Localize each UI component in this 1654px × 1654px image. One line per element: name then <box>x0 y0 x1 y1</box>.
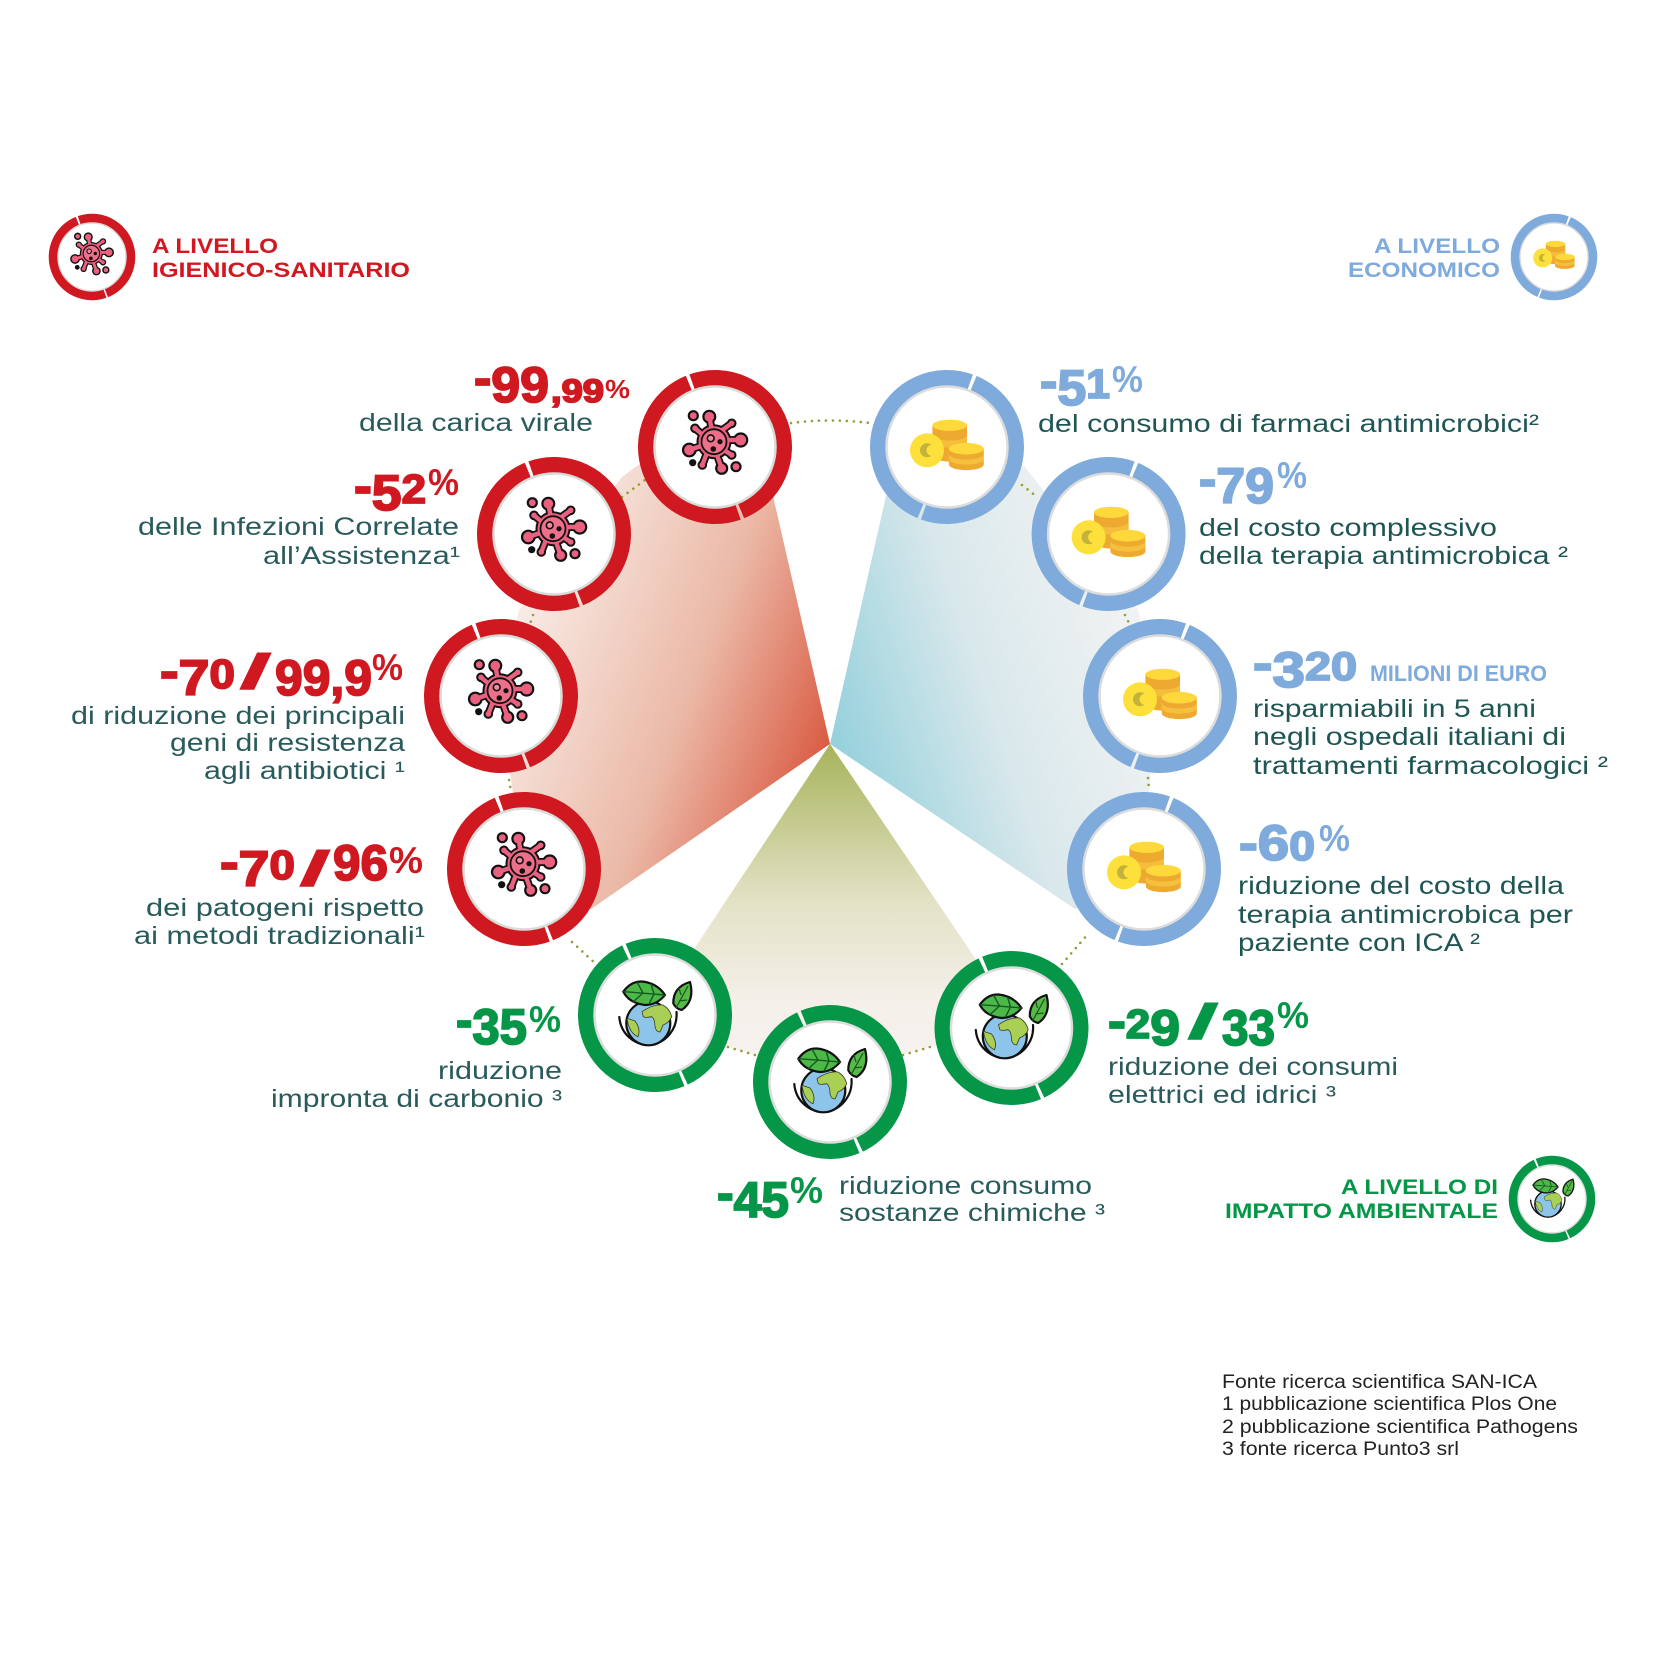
stat: -70/96% patogeni: 96 <box>333 835 388 891</box>
stat: -70/99,9% geni di resistenza: 99,9 <box>275 650 372 706</box>
icon: globe 2 <box>740 992 920 1172</box>
stat: -52% Infezioni Correlate: - <box>354 458 371 514</box>
stat: -70/99,9% geni di resistenza: 0 <box>210 651 235 697</box>
stat: -45% sostanze chimiche: 45 <box>734 1172 789 1228</box>
stat: -29/33% consumi elettrici e idrici <box>1108 993 1398 1109</box>
stat: -70/99,9% geni di resistenza: agli antibiotici ¹ <box>204 757 405 785</box>
icon: virus 1 <box>627 359 803 535</box>
stat: -70/99,9% geni di resistenza <box>71 643 405 785</box>
icon: virus 3 <box>413 608 589 784</box>
stat: -52% Infezioni Correlate: all’Assistenza¹ <box>263 542 460 570</box>
stat: -51% farmaci antimicrobici: del consumo di farmaci antimicrobici² <box>1038 410 1539 438</box>
footnotes: Fonte ricerca scientifica SAN-ICA <box>1222 1372 1537 1393</box>
stat: -29/33% consumi elettrici e idrici: riduzione dei consumi <box>1108 1053 1398 1081</box>
stat: -52% Infezioni Correlate: delle Infezioni Correlate <box>138 513 459 541</box>
stat: -60% costo per paziente: % <box>1319 818 1350 859</box>
stat: -99,99% della carica virale: della carica virale <box>359 409 593 437</box>
icon: coins 4 <box>1054 779 1234 959</box>
stat: -29/33% consumi elettrici e idrici: 9 <box>1150 1000 1180 1056</box>
stat: -29/33% consumi elettrici e idrici: 33 <box>1222 1000 1275 1056</box>
icon: virus 4 <box>436 781 612 957</box>
footnotes: 2 pubblicazione scientifica Pathogens <box>1222 1417 1578 1438</box>
stat: -79% costo complessivo <box>1199 451 1568 570</box>
stat: -60% costo per paziente: terapia antimicrobica per <box>1238 901 1573 929</box>
legend label: igienico-sanitario: A LIVELLO <box>152 235 278 258</box>
stat: -35% impronta di carbonio: riduzione <box>438 1057 562 1085</box>
stat: -70/96% patogeni: / <box>298 841 332 897</box>
legend label: economico: A LIVELLO <box>1374 235 1500 258</box>
stat: -45% sostanze chimiche: riduzione consumo <box>839 1172 1092 1200</box>
stat: -320 milioni di euro: MILIONI DI EURO <box>1370 661 1547 686</box>
stat: -320 milioni di euro: 20 <box>1305 645 1357 689</box>
footnotes: 1 pubblicazione scientifica Plos One <box>1222 1394 1557 1415</box>
icon: globe 3 <box>921 938 1102 1118</box>
stat: -35% impronta di carbonio: - <box>456 992 473 1048</box>
stat: -320 milioni di euro: 3 <box>1272 642 1305 698</box>
stat: -79% costo complessivo: 79 <box>1216 458 1274 514</box>
stat: -79% costo complessivo: - <box>1199 451 1216 507</box>
stat: -79% costo complessivo: del costo complessivo <box>1199 514 1497 542</box>
legend label: economico: ECONOMICO <box>1348 259 1500 282</box>
icon: virus 2 <box>466 446 642 622</box>
footnotes <box>1222 1372 1578 1460</box>
stat: -70/99,9% geni di resistenza: di riduzione dei principali <box>71 702 405 730</box>
legend: igienico-sanitario <box>43 208 410 306</box>
stat: -79% costo complessivo: % <box>1277 455 1307 496</box>
legend: economico <box>1348 206 1605 308</box>
stat: -70/96% patogeni: dei patogeni rispetto <box>146 894 424 922</box>
stat: -320 milioni di euro <box>1253 635 1608 780</box>
stat: -320 milioni di euro: negli ospedali italiani di <box>1253 723 1566 751</box>
icon: coins 2 <box>1018 444 1199 624</box>
stat: -29/33% consumi elettrici e idrici: % <box>1277 995 1309 1036</box>
legend label: impatto ambientale: IMPATTO AMBIENTALE <box>1225 1200 1498 1223</box>
legend label: impatto ambientale: A LIVELLO DI <box>1341 1176 1498 1199</box>
stat: -99,99% della carica virale: - <box>474 350 491 406</box>
stat: -45% sostanze chimiche <box>717 1165 1105 1228</box>
stat: -70/96% patogeni: ai metodi tradizionali¹ <box>134 922 425 950</box>
legend icon: globe <box>1501 1148 1603 1250</box>
legend label: impatto ambientale <box>1225 1176 1498 1223</box>
stat: -99,99% della carica virale: % <box>605 374 630 404</box>
icon: coins 1 <box>857 357 1037 537</box>
stat: -70/99,9% geni di resistenza: - <box>160 643 177 699</box>
stat: -70/99,9% geni di resistenza: % <box>372 647 403 688</box>
stat: -52% Infezioni Correlate: % <box>428 462 459 503</box>
stat: -45% sostanze chimiche: - <box>717 1165 734 1221</box>
legend label: economico <box>1348 235 1500 282</box>
stat: -52% Infezioni Correlate <box>138 458 460 570</box>
legend: impatto ambientale <box>1225 1148 1603 1250</box>
stat: -29/33% consumi elettrici e idrici: -2 <box>1108 993 1149 1049</box>
legend icon: virus <box>43 208 141 306</box>
stat: -35% impronta di carbonio: impronta di carbonio ³ <box>271 1085 562 1113</box>
stat: -45% sostanze chimiche: % <box>790 1170 823 1211</box>
stat: -51% farmaci antimicrobici: 1 <box>1086 361 1110 407</box>
icon: globe 1 <box>565 925 745 1105</box>
stat: -79% costo complessivo: della terapia antimicrobica ² <box>1199 542 1568 570</box>
stat: -70/96% patogeni: 7 <box>239 841 270 897</box>
stat: -60% costo per paziente: paziente con ICA ² <box>1238 929 1480 957</box>
dotted connector arcs <box>509 420 1149 1055</box>
fan: impatto ambientale <box>655 744 1011 1082</box>
fan: igienico-sanitario <box>501 447 830 909</box>
stat: -60% costo per paziente: -60 <box>1239 815 1315 871</box>
stat: -70/99,9% geni di resistenza: / <box>238 644 273 700</box>
stat: -52% Infezioni Correlate: 2 <box>402 466 426 512</box>
stat: -320 milioni di euro: risparmiabili in 5 anni <box>1253 695 1536 723</box>
legend icon: coins <box>1503 206 1605 308</box>
stat: -51% farmaci antimicrobici: 5 <box>1057 360 1086 416</box>
stat: -70/96% patogeni <box>134 834 425 950</box>
stat: -35% impronta di carbonio: % <box>529 999 561 1040</box>
stat: -45% sostanze chimiche: sostanze chimiche ³ <box>839 1199 1105 1227</box>
stat: -29/33% consumi elettrici e idrici: / <box>1186 994 1220 1050</box>
stat: -35% impronta di carbonio <box>271 992 562 1113</box>
stat: -70/96% patogeni: - <box>220 834 237 890</box>
stat: -70/99,9% geni di resistenza: geni di resistenza <box>170 729 405 757</box>
footnotes: 3 fonte ricerca Punto3 srl <box>1222 1439 1459 1460</box>
stat: -35% impronta di carbonio: 35 <box>472 999 527 1055</box>
stat: -51% farmaci antimicrobici: - <box>1040 353 1057 409</box>
stat: -60% costo per paziente: riduzione del costo della <box>1238 872 1564 900</box>
stat: -99,99% della carica virale: ,99 <box>551 373 604 409</box>
stat: -29/33% consumi elettrici e idrici: elettrici ed idrici ³ <box>1108 1081 1336 1109</box>
legend label: igienico-sanitario <box>152 235 410 282</box>
stat: -51% farmaci antimicrobici: % <box>1112 359 1143 400</box>
stat: -52% Infezioni Correlate: 5 <box>372 465 402 521</box>
stat: -320 milioni di euro: trattamenti farmacologici ² <box>1253 752 1608 780</box>
stat: -70/99,9% geni di resistenza: 7 <box>179 650 210 706</box>
stat: -99,99% della carica virale <box>359 350 630 437</box>
icon: coins 3 <box>1070 606 1250 786</box>
legend label: igienico-sanitario: IGIENICO-SANITARIO <box>152 259 410 282</box>
stat: -320 milioni di euro: - <box>1253 635 1270 691</box>
stat: -70/96% patogeni: 0 <box>270 842 295 888</box>
fan: economico <box>830 447 1160 909</box>
stat: -60% costo per paziente <box>1238 815 1573 957</box>
stat: -51% farmaci antimicrobici <box>1038 353 1539 438</box>
stat: -70/96% patogeni: % <box>389 840 423 881</box>
stat: -99,99% della carica virale: 99 <box>491 357 549 413</box>
